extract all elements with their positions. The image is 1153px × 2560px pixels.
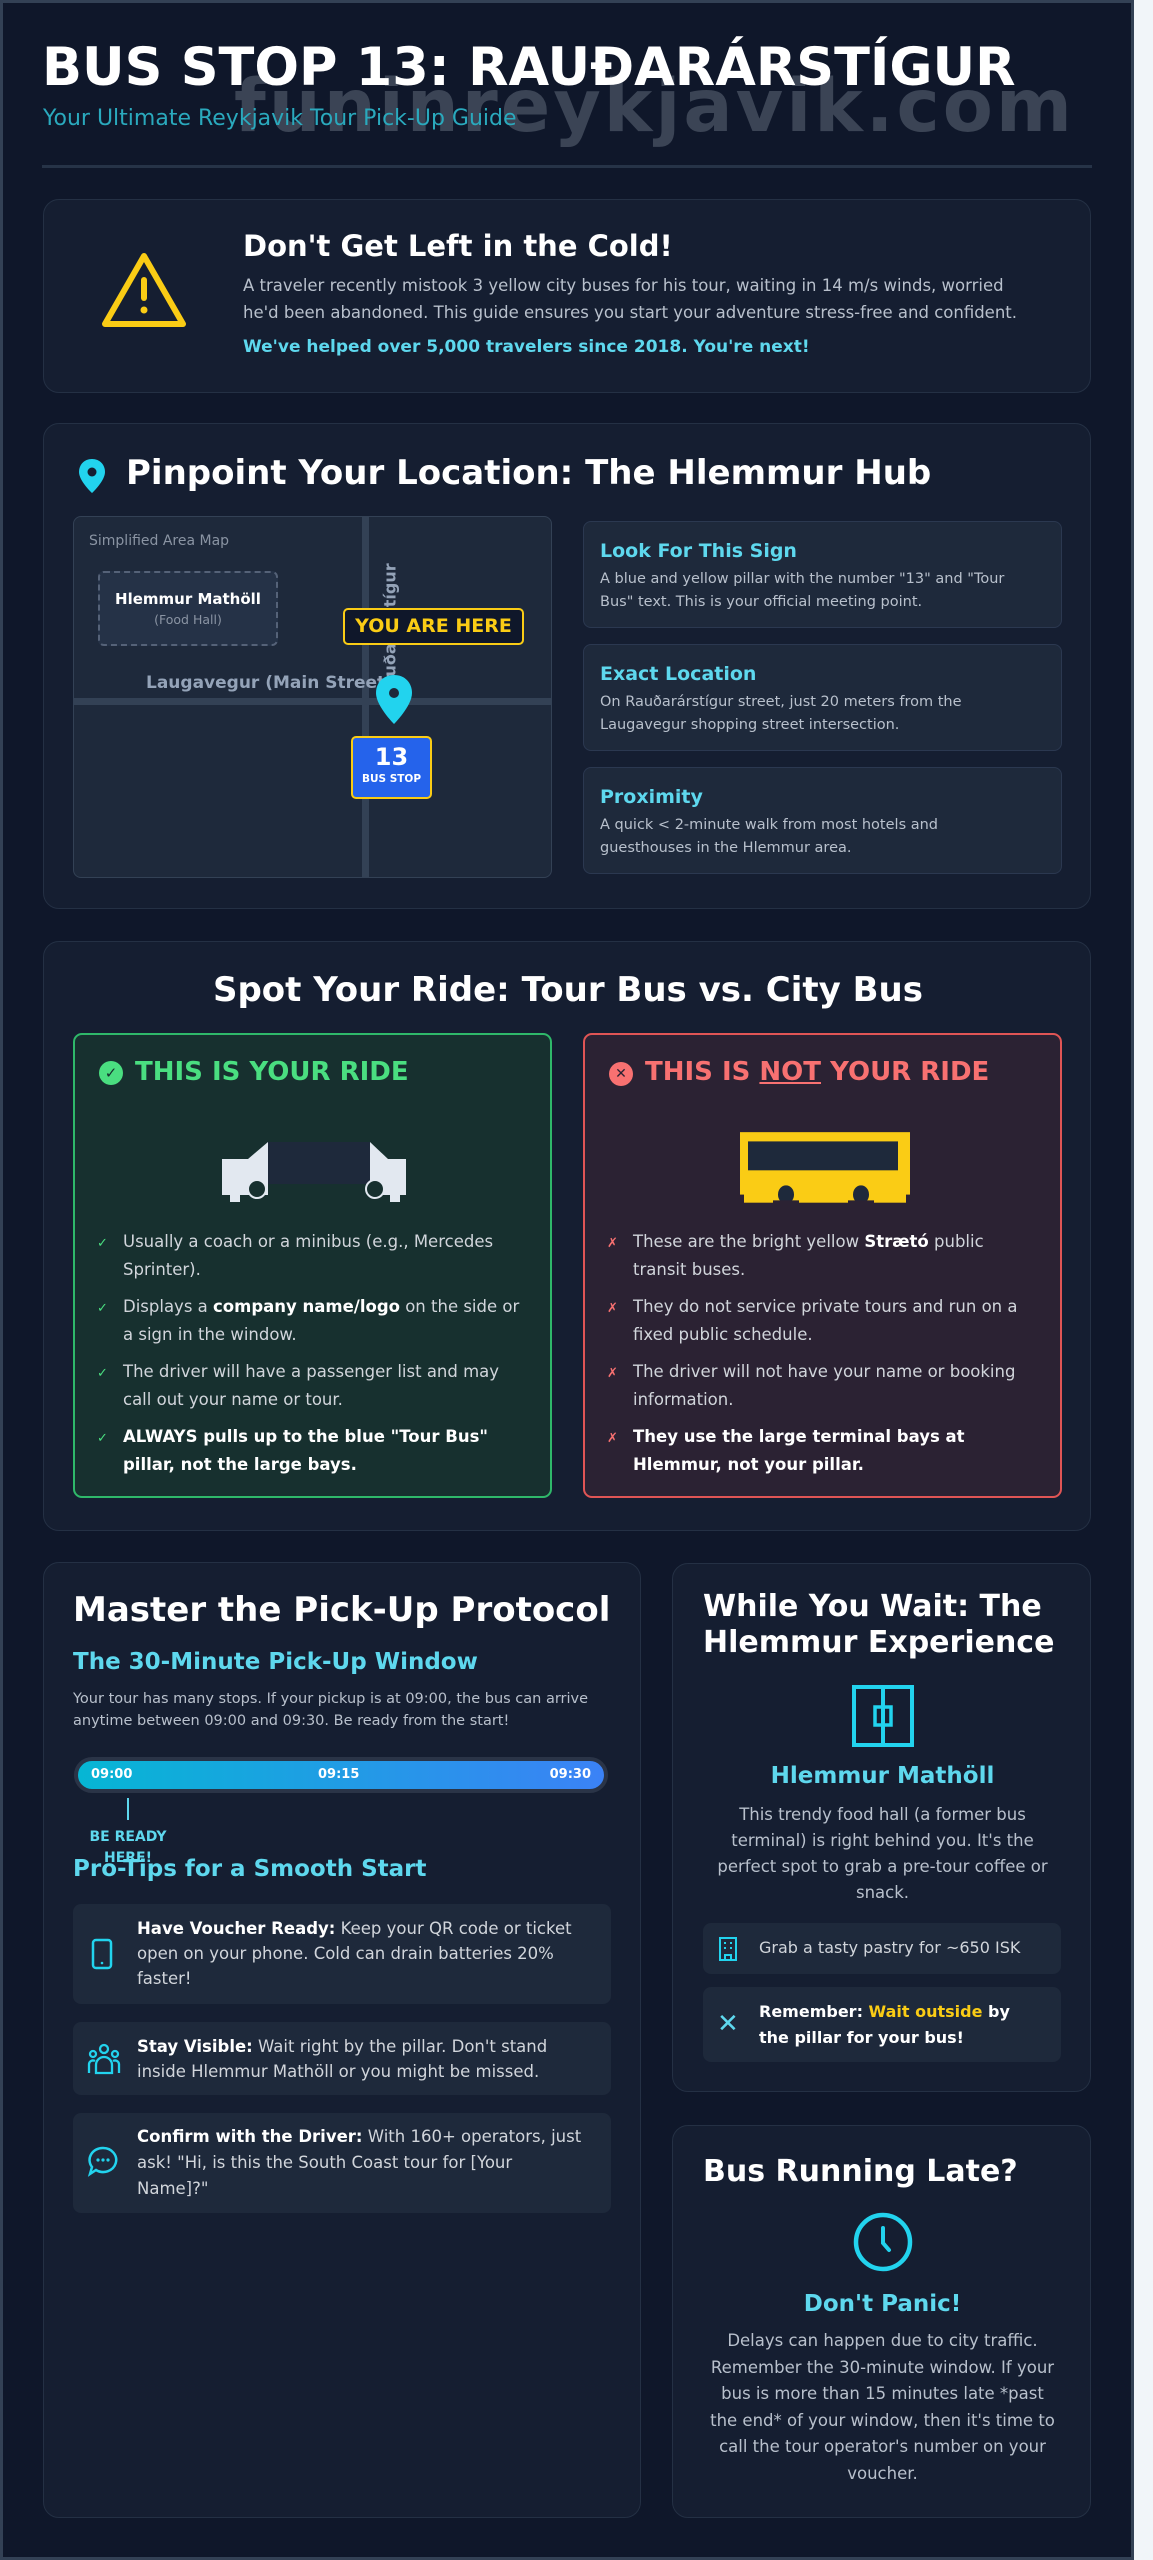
icon: clock — [854, 2212, 912, 2272]
info: proximity: A quick < 2-minute walk from most hotels and guesthouses in the Hlemmur area. — [600, 817, 938, 856]
tip: visible: Stay Visible: Wait right by the pillar. Don't stand inside Hlemmur Mathöll or you might be missed. — [137, 2037, 547, 2081]
panel: bus running late — [672, 2125, 1091, 2518]
heading: Don't Get Left in the Cold! — [243, 229, 673, 263]
list: They do not service private tours and run on a fixed public schedule. — [633, 1297, 1018, 1344]
food hall: Hlemmur Mathöll — [115, 590, 261, 608]
info: exact location: Exact Location — [600, 663, 756, 685]
list: ✓ — [97, 1366, 108, 1381]
bus stop sign: BUS STOP — [362, 773, 421, 785]
panel: location — [43, 423, 1091, 909]
timeline bar: 09:15 — [318, 1767, 359, 1782]
heading: Spot Your Ride: Tour Bus vs. City Bus — [213, 970, 923, 1010]
panel: intro warning — [43, 199, 1091, 393]
list: ✓ — [97, 1431, 108, 1446]
tip: pastry: Grab a tasty pastry for ~650 ISK — [759, 1938, 1020, 1957]
tip: remember — [703, 1987, 1061, 2062]
info: proximity: Proximity — [600, 786, 703, 808]
list: These are the bright yellow Strætó public transit buses. — [633, 1232, 984, 1279]
list: Displays a company name/logo on the side or a sign in the window. — [123, 1297, 519, 1344]
timeline bar: 09:00 — [91, 1767, 132, 1782]
title: BUS STOP 13: RAUÐARÁRSTÍGUR — [42, 37, 1016, 98]
list: ✓ — [97, 1236, 108, 1251]
icon: van — [222, 1142, 406, 1202]
icon: map pin — [376, 675, 412, 724]
timeline bar: 09:30 — [550, 1767, 591, 1782]
info: sign — [583, 521, 1062, 628]
icon: warning — [102, 253, 186, 327]
header: THIS IS YOUR RIDE — [135, 1057, 409, 1087]
info: proximity — [583, 767, 1062, 874]
panel: comparison — [43, 941, 1091, 1531]
list: ✗ — [607, 1236, 618, 1251]
bus stop sign — [351, 736, 432, 799]
timeline bar — [74, 1757, 608, 1793]
list: ✗ — [607, 1366, 618, 1381]
panel: your ride — [73, 1033, 552, 1498]
subheading: The 30-Minute Pick-Up Window — [73, 1649, 478, 1675]
subheading: Don't Panic! — [804, 2291, 961, 2317]
subheading: Hlemmur Mathöll — [771, 1763, 994, 1789]
callout: We've helped over 5,000 travelers since 2018. You're next! — [243, 337, 810, 357]
heading: Pinpoint Your Location: The Hlemmur Hub — [126, 453, 931, 493]
list — [607, 1232, 1018, 1474]
icon: pin — [79, 459, 105, 493]
panel: not your ride — [583, 1033, 1062, 1498]
map — [73, 516, 552, 878]
header: ✓ — [105, 1064, 117, 1082]
heading: Master the Pick-Up Protocol — [73, 1590, 610, 1630]
heading: Bus Running Late? — [703, 2154, 1018, 2189]
text block: A traveler recently mistook 3 yellow city buses for his tour, waiting in 14 m/s winds, worried he'd been abandoned. This guide ensures you start your adventure stress-free and confident. — [243, 276, 1017, 322]
tip: remember: Remember: Wait outside by the pillar for your bus! — [759, 2002, 1010, 2047]
info: exact location: On Rauðarárstígur street, just 20 meters from the Laugavegur shopping street intersection. — [600, 694, 962, 733]
header: ✕ — [615, 1066, 627, 1082]
icon: city bus — [740, 1132, 910, 1203]
watermark: funinreykjavik.com — [234, 64, 1075, 149]
info: exact location — [583, 644, 1062, 751]
subtitle: Your Ultimate Reykjavik Tour Pick-Up Guide — [43, 106, 517, 131]
food hall: (Food Hall) — [154, 612, 222, 627]
list: ✗ — [607, 1431, 618, 1446]
info: sign: A blue and yellow pillar with the number "13" and "Tour Bus" text. This is your official meeting point. — [600, 571, 1004, 610]
tip: visible — [73, 2022, 611, 2095]
you are here: YOU ARE HERE — [355, 615, 512, 637]
list — [97, 1232, 520, 1474]
list: ALWAYS pulls up to the blue "Tour Bus" pillar, not the large bays. — [123, 1427, 488, 1474]
tip: voucher — [73, 1904, 611, 2004]
street label vertical: Rauðarárstígur — [380, 563, 400, 700]
list: Usually a coach or a minibus (e.g., Mercedes Sprinter). — [123, 1232, 493, 1279]
info: sign: Look For This Sign — [600, 540, 797, 562]
icon: door — [852, 1685, 914, 1747]
label: be ready: BE READY HERE! — [89, 1829, 167, 1866]
tip: pastry — [703, 1923, 1061, 1974]
text block: Delays can happen due to city traffic. Remember the 30-minute window. If your bus is more than 15 minutes late *past the end* of your window, then it's time to call the tour operator's number on your voucher. — [710, 2331, 1055, 2483]
food hall — [98, 571, 278, 646]
list: ✓ — [97, 1301, 108, 1316]
list: The driver will not have your name or booking information. — [633, 1362, 1015, 1409]
list: The driver will have a passenger list and may call out your name or tour. — [123, 1362, 499, 1409]
header: THIS IS NOT YOUR RIDE — [645, 1057, 989, 1087]
tip: remember: ✕ — [717, 2009, 739, 2039]
tip: voucher: Have Voucher Ready: Keep your QR code or ticket open on your phone. Cold can drain batteries 20% faster! — [137, 1919, 572, 1988]
bus stop sign: 13 — [375, 743, 408, 771]
text block: Your tour has many stops. If your pickup is at 09:00, the bus can arrive anytime between 09:00 and 09:30. Be ready from the start! — [73, 1691, 588, 1729]
heading: While You Wait: The Hlemmur Experience — [703, 1589, 1054, 1660]
panel: pick-up protocol — [43, 1562, 641, 2518]
tip: confirm — [73, 2113, 611, 2213]
you are here — [343, 608, 524, 645]
list: They use the large terminal bays at Hlemmur, not your pillar. — [633, 1427, 965, 1474]
tip: confirm: Confirm with the Driver: With 160+ operators, just ask! "Hi, is this the South Coast tour for [Your Name]?" — [137, 2127, 581, 2198]
street label: Laugavegur (Main Street) — [146, 673, 393, 693]
panel: while you wait — [672, 1563, 1091, 2092]
list: ✗ — [607, 1301, 618, 1316]
text block: This trendy food hall (a former bus terminal) is right behind you. It's the perfect spot to grab a pre-tour coffee or snack. — [717, 1805, 1048, 1902]
subheading: Pro-Tips for a Smooth Start — [73, 1856, 427, 1882]
map: Simplified Area Map — [89, 533, 229, 549]
